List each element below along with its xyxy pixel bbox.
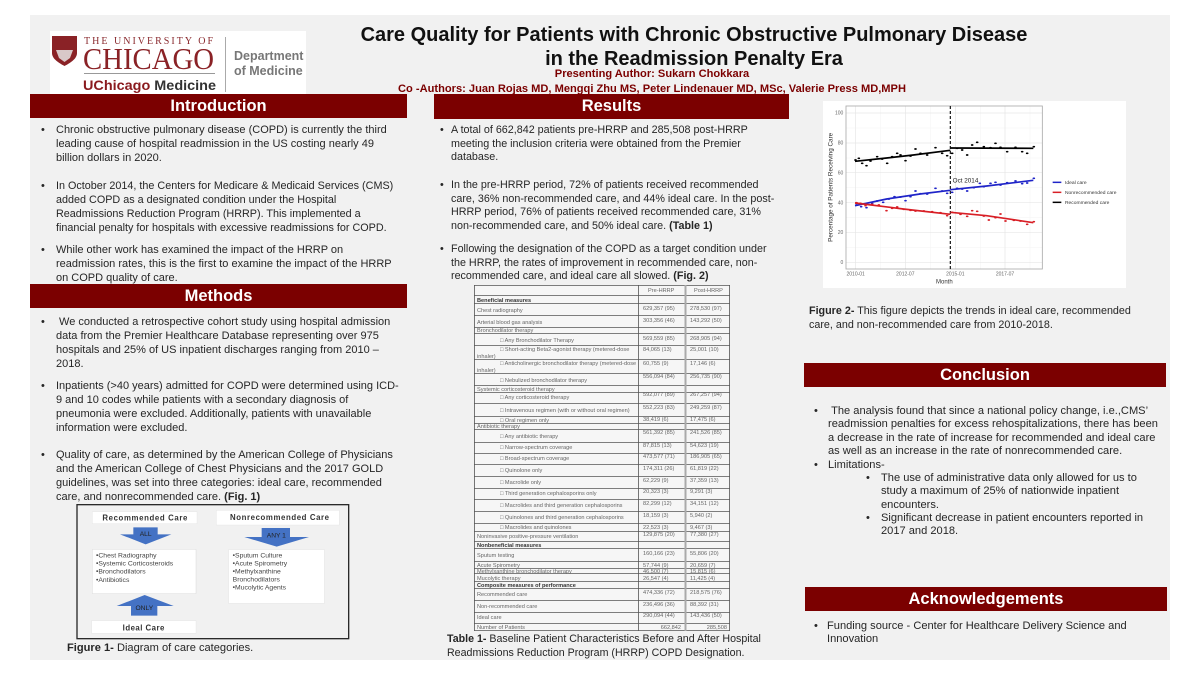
table 1: patient characteristics before and after HRRP: □ Oral regimen only bbox=[500, 418, 549, 424]
text block: conclusion bullets: • bbox=[814, 405, 818, 417]
text block: methods bullets: • bbox=[41, 449, 45, 461]
text block: introduction bullets: billion dollars in 2020. bbox=[56, 152, 162, 164]
heading: Results: Results bbox=[582, 97, 641, 115]
table 1: patient characteristics before and after HRRP: Antibiotic therapy bbox=[477, 424, 520, 430]
table 1: patient characteristics before and after HRRP: 268,905 (94) bbox=[690, 336, 722, 342]
legend: Nonrecommended care bbox=[1065, 190, 1117, 196]
text block: introduction bullets: added COPD as a designated condition under the Hospital bbox=[56, 194, 336, 206]
table 1: patient characteristics before and after HRRP: 267,257 (94) bbox=[690, 392, 722, 398]
series: recommended care bbox=[855, 142, 1034, 166]
heading: Methods: Methods bbox=[185, 287, 252, 305]
text block: conclusion bullets: • bbox=[814, 459, 818, 471]
heading: Acknowledgements bbox=[805, 587, 1167, 611]
presenting author and co-authors bbox=[398, 68, 906, 94]
table 1: patient characteristics before and after HRRP: 9,467 (3) bbox=[690, 525, 713, 531]
text block: results bullets: database. bbox=[451, 151, 498, 163]
presenting author and co-authors: Co -Authors: Juan Rojas MD, Mengqi Zhu MS, Peter Lindenauer MD, MSc, Valerie Press MD,MPH bbox=[398, 82, 906, 94]
table 1: patient characteristics before and after HRRP: □ Macrolides and third generation cephalosporins bbox=[500, 503, 623, 509]
table 1: patient characteristics before and after HRRP: 278,530 (97) bbox=[690, 306, 722, 312]
table 1: patient characteristics before and after HRRP: 160,166 (23) bbox=[643, 551, 675, 557]
box: ideal care: Ideal Care bbox=[123, 623, 165, 632]
text block: results bullets: A total of 662,842 patients pre-HRRP and 285,508 post-HRRP bbox=[451, 124, 748, 136]
table 1: patient characteristics before and after HRRP: 84,065 (13) bbox=[643, 347, 672, 353]
logo: University of Chicago, Department of Medicine: UChicago Medicine bbox=[83, 77, 216, 93]
text block: results bullets: • bbox=[440, 243, 444, 255]
table 1: patient characteristics before and after HRRP: 11,425 (4) bbox=[690, 576, 715, 582]
text block: results bullets: non-recommended care, and 50% ideal care. (Table 1) bbox=[451, 220, 713, 232]
text block: introduction bullets: • bbox=[41, 244, 45, 256]
title: Care Quality for Patients with Chronic Obstructive Pulmonary Disease bbox=[361, 24, 1027, 46]
table 1: patient characteristics before and after HRRP: 129,875 (20) bbox=[643, 532, 675, 538]
table 1: patient characteristics before and after HRRP: Sputum testing bbox=[477, 553, 514, 559]
table 1: patient characteristics before and after HRRP: 15,815 (6) bbox=[690, 569, 716, 575]
text block: conclusion bullets: • bbox=[866, 512, 870, 524]
legend: Recommended care bbox=[1065, 200, 1110, 206]
y axis labels bbox=[835, 111, 844, 266]
table 1: patient characteristics before and after HRRP: 20,659 (7) bbox=[690, 563, 716, 569]
table 1: patient characteristics before and after HRRP: Bronchodilator therapy bbox=[477, 328, 533, 334]
table 1: patient characteristics before and after HRRP: 87,815 (13) bbox=[643, 443, 672, 449]
y axis labels: 0 bbox=[841, 260, 844, 266]
text block: introduction bullets: While other work has examined the impact of the HRRP on bbox=[56, 244, 343, 256]
arrow: ALL bbox=[120, 527, 171, 544]
table 1: patient characteristics before and after HRRP: □ Quinolones and third generation cephalosporins bbox=[500, 515, 624, 521]
table 1: patient characteristics before and after HRRP: Ideal care bbox=[477, 615, 502, 621]
text block: introduction bullets: on COPD quality of care. bbox=[56, 272, 178, 284]
table 1: patient characteristics before and after HRRP: 22,523 (3) bbox=[643, 525, 669, 531]
table 1: patient characteristics before and after HRRP: 88,392 (31) bbox=[690, 602, 719, 608]
heading: Conclusion bbox=[804, 363, 1166, 387]
text block: methods bullets: information were excluded. bbox=[56, 422, 187, 434]
table 1: patient characteristics before and after HRRP: □ Macrolide only bbox=[500, 480, 541, 486]
table 1: patient characteristics before and after HRRP: 249,259 (87) bbox=[690, 405, 722, 411]
table 1: patient characteristics before and after HRRP: Noninvasive positive-pressure ventilation bbox=[477, 534, 578, 540]
caption: figure 1: Figure 1- Diagram of care categories. bbox=[67, 642, 253, 654]
table 1: patient characteristics before and after HRRP: 46,500 (7) bbox=[643, 569, 669, 575]
table 1: patient characteristics before and after HRRP: □ Short-acting Beta2-agonist therapy (metered-dose bbox=[500, 347, 629, 353]
heading: Methods bbox=[30, 284, 407, 308]
text block: methods bullets: hospitals and 25% of US inpatient discharges ranging from 2010 – bbox=[56, 344, 379, 356]
table 1: patient characteristics before and after HRRP: Methylxanthine bronchodilator therapy bbox=[477, 569, 572, 575]
list: recommended measures bbox=[92, 549, 196, 594]
text block: introduction bullets: In October 2014, the Centers for Medicare & Medicaid Services (CMS) bbox=[56, 180, 393, 192]
text block: results bullets bbox=[440, 124, 774, 282]
table 1: patient characteristics before and after HRRP: □ Nebulized bronchodilator therapy bbox=[500, 378, 587, 384]
text block: conclusion bullets: encounters. bbox=[881, 499, 939, 511]
y axis labels: 100 bbox=[835, 111, 844, 117]
text block: conclusion bullets: a decrease in the rate of increase for recommended and ideal care bbox=[828, 432, 1155, 444]
table 1: patient characteristics before and after HRRP: 20,323 (3) bbox=[643, 489, 669, 495]
caption: table 1: Table 1- Baseline Patient Characteristics Before and After Hospital bbox=[447, 633, 761, 645]
table 1: patient characteristics before and after HRRP bbox=[474, 285, 730, 631]
table 1: patient characteristics before and after HRRP: 256,735 (90) bbox=[690, 374, 722, 380]
y axis labels: 20 bbox=[838, 230, 844, 236]
table 1: patient characteristics before and after HRRP: □ Any antibiotic therapy bbox=[500, 434, 558, 440]
table 1: patient characteristics before and after HRRP: 82,299 (12) bbox=[643, 501, 672, 507]
table 1: patient characteristics before and after HRRP: □ Macrolides and quinolones bbox=[500, 525, 572, 531]
text block: methods bullets bbox=[41, 316, 399, 503]
x axis labels: 2017-07 bbox=[996, 271, 1014, 277]
table 1: patient characteristics before and after HRRP: □ Narrow-spectrum coverage bbox=[500, 445, 572, 451]
table 1: patient characteristics before and after HRRP: Pre-HRRP bbox=[648, 288, 675, 294]
table 1: patient characteristics before and after HRRP: Nonbeneficial measures bbox=[477, 543, 541, 549]
text block: results bullets: the HRRP, the rates of improvement in recommended care, non- bbox=[451, 257, 757, 269]
x axis labels bbox=[846, 271, 1014, 277]
x axis labels: 2012-07 bbox=[896, 271, 915, 277]
table 1: patient characteristics before and after HRRP: □ Any corticosteroid therapy bbox=[500, 395, 569, 401]
table 1: patient characteristics before and after HRRP: 290,094 (44) bbox=[643, 613, 675, 619]
caption: table 1 bbox=[447, 633, 761, 659]
y axis labels: 60 bbox=[838, 170, 844, 176]
text block: results bullets: care, 36% non-recommended care, and 44% ideal care. In the post- bbox=[451, 193, 774, 205]
table 1: patient characteristics before and after HRRP: 17,475 (6) bbox=[690, 417, 716, 423]
text block: methods bullets: care, and nonrecommended care. (Fig. 1) bbox=[56, 491, 260, 503]
table 1: patient characteristics before and after HRRP: 5,940 (2) bbox=[690, 513, 713, 519]
text block: methods bullets: 2018. bbox=[56, 358, 84, 370]
arrow: ONLY bbox=[117, 595, 174, 616]
table 1: patient characteristics before and after HRRP: 34,151 (12) bbox=[690, 501, 719, 507]
table 1: patient characteristics before and after HRRP: 218,575 (76) bbox=[690, 590, 722, 596]
table 1: patient characteristics before and after HRRP: Systemic corticosteroid therapy bbox=[477, 387, 555, 393]
title: in the Readmission Penalty Era bbox=[545, 48, 843, 70]
caption: figure 2 bbox=[809, 305, 1131, 331]
text block: methods bullets: We conducted a retrospective cohort study using hospital admission bbox=[59, 316, 390, 328]
arrow: ANY 1: ANY 1 bbox=[267, 533, 286, 540]
text block: conclusion bullets: 2017 and 2018. bbox=[881, 525, 958, 537]
series: ideal care bbox=[855, 178, 1034, 208]
table 1: patient characteristics before and after HRRP: 17,146 (6) bbox=[690, 361, 716, 367]
table 1: patient characteristics before and after HRRP: 569,559 (85) bbox=[643, 336, 675, 342]
logo: University of Chicago, Department of Medicine: CHICAGO bbox=[83, 41, 214, 76]
series: nonrecommended care bbox=[855, 203, 1034, 224]
text block: methods bullets: data from the Premier Healthcare Database representing over 975 bbox=[56, 330, 379, 342]
figure 1: diagram of care categories bbox=[76, 504, 350, 640]
table 1: patient characteristics before and after HRRP: 552,223 (83) bbox=[643, 405, 675, 411]
list: recommended measures: •Chest Radiography bbox=[96, 553, 157, 560]
list: nonrecommended measures: •Mucolytic Agents bbox=[233, 585, 287, 592]
text block: funding source: Funding source - Center for Healthcare Delivery Science and bbox=[827, 620, 1127, 632]
legend bbox=[1053, 180, 1117, 206]
logo: University of Chicago, Department of Medicine bbox=[50, 31, 306, 94]
table 1: patient characteristics before and after HRRP: 37,359 (13) bbox=[690, 478, 719, 484]
logo: University of Chicago, Department of Medicine: THE UNIVERSITY OF bbox=[84, 36, 213, 47]
table 1: patient characteristics before and after HRRP: 38,419 (6) bbox=[643, 417, 669, 423]
text block: conclusion bullets: study a maximum of 25% of nationwide inpatient bbox=[881, 485, 1119, 497]
axis title: Percentage of Patients Receiving Care: Percentage of Patients Receiving Care bbox=[827, 132, 834, 242]
text block: conclusion bullets: The analysis found that since a national policy change, i.e.,CMS’ bbox=[831, 405, 1148, 417]
table 1: patient characteristics before and after HRRP: inhaler) bbox=[477, 354, 496, 360]
text block: conclusion bullets: • bbox=[866, 472, 870, 484]
box: recommended care: Recommended Care bbox=[102, 513, 188, 522]
table 1: patient characteristics before and after HRRP: 26,547 (4) bbox=[643, 576, 669, 582]
text block: conclusion bullets: The use of administrative data only allowed for us to bbox=[881, 472, 1137, 484]
text block: results bullets: • bbox=[440, 124, 444, 136]
list: nonrecommended measures: •Acute Spirometry bbox=[233, 560, 288, 567]
text block: results bullets: In the pre-HRRP period, 72% of patients received recommended bbox=[451, 179, 759, 191]
table 1: patient characteristics before and after HRRP: 61,819 (22) bbox=[690, 466, 719, 472]
text block: methods bullets: Inpatients (>40 years) admitted for COPD were determined using ICD- bbox=[56, 380, 399, 392]
table 1: patient characteristics before and after HRRP: □ Quinolone only bbox=[500, 468, 542, 474]
text block: results bullets: HRRP period, 76% of patients received recommended care, 31% bbox=[451, 206, 761, 218]
vertical marker: Oct 2014: Oct 2014 bbox=[953, 177, 979, 184]
table 1: patient characteristics before and after HRRP: 285,508 bbox=[707, 625, 727, 631]
text block: results bullets: meeting the inclusion criteria were obtained from the Premier bbox=[451, 138, 741, 150]
text block: introduction bullets: leading cause of hospital readmission in the US costing nearly 49 bbox=[56, 138, 374, 150]
caption: figure 2: care, and non-recommended care from 2010-2018. bbox=[809, 319, 1053, 331]
box: ideal care bbox=[92, 621, 196, 633]
title bbox=[361, 24, 1027, 70]
text block: methods bullets: • bbox=[41, 380, 45, 392]
table 1: patient characteristics before and after HRRP: 25,001 (10) bbox=[690, 347, 719, 353]
logo: University of Chicago, Department of Medicine: of Medicine bbox=[234, 64, 303, 78]
table 1: patient characteristics before and after HRRP: 143,292 (50) bbox=[690, 318, 722, 324]
table 1: patient characteristics before and after HRRP: 143,436 (50) bbox=[690, 613, 722, 619]
text block: introduction bullets: financial penalty for hospitals with excessive readmissions for COPD. bbox=[56, 222, 387, 234]
table 1: patient characteristics before and after HRRP: inhaler) bbox=[477, 368, 496, 374]
table 1: patient characteristics before and after HRRP: □ Any Bronchodilator Therapy bbox=[500, 338, 574, 344]
table 1: patient characteristics before and after HRRP: 62,229 (9) bbox=[643, 478, 669, 484]
table 1: patient characteristics before and after HRRP: 9,291 (3) bbox=[690, 489, 713, 495]
figure 2: trend line chart bbox=[823, 101, 1126, 288]
text block: introduction bullets: • bbox=[41, 124, 45, 136]
table 1: patient characteristics before and after HRRP: Composite measures of performance bbox=[477, 583, 576, 589]
text block: introduction bullets: readmission rates, this is the first to examine the impact of the HRRP bbox=[56, 258, 392, 270]
heading: Introduction bbox=[30, 94, 407, 118]
text block: introduction bullets: Readmissions Reduction Program (HRRP). This implemented a bbox=[56, 208, 361, 220]
table 1: patient characteristics before and after HRRP: Post-HRRP bbox=[694, 288, 723, 294]
list: recommended measures: •Systemic Corticosteroids bbox=[96, 561, 174, 568]
table 1: patient characteristics before and after HRRP: 474,336 (72) bbox=[643, 590, 675, 596]
table 1: patient characteristics before and after HRRP: 561,392 (85) bbox=[643, 430, 675, 436]
table 1: patient characteristics before and after HRRP: 556,094 (84) bbox=[643, 374, 675, 380]
list: recommended measures: •Bronchodilators bbox=[96, 569, 146, 576]
heading: Acknowledgements: Acknowledgements bbox=[909, 590, 1063, 608]
text block: results bullets: Following the designation of the COPD as a target condition under bbox=[451, 243, 767, 255]
text block: methods bullets: Quality of care, as determined by the American College of Physicians bbox=[56, 449, 393, 461]
list: nonrecommended measures: •Sputum Culture bbox=[233, 552, 282, 559]
table 1: patient characteristics before and after HRRP: □ Third generation cephalosporins only bbox=[500, 491, 597, 497]
heading: Results bbox=[434, 94, 789, 119]
text block: funding source bbox=[814, 620, 1127, 645]
text block: conclusion bullets: as well as an increase in the rate of nonrecommended care. bbox=[828, 445, 1122, 457]
table 1: patient characteristics before and after HRRP: 18,159 (3) bbox=[643, 513, 669, 519]
table 1: patient characteristics before and after HRRP: Acute Spirometry bbox=[477, 563, 520, 569]
table 1: patient characteristics before and after HRRP: 236,496 (36) bbox=[643, 602, 675, 608]
box: nonrecommended care bbox=[216, 510, 339, 525]
text block: introduction bullets bbox=[41, 124, 393, 284]
logo: University of Chicago, Department of Medicine: Department bbox=[234, 49, 304, 63]
box: recommended care bbox=[92, 512, 197, 524]
y axis labels: 40 bbox=[838, 200, 844, 206]
arrow: ANY 1 bbox=[244, 528, 309, 547]
table 1: patient characteristics before and after HRRP: 186,905 (65) bbox=[690, 454, 722, 460]
table 1: patient characteristics before and after HRRP: 662,842 bbox=[661, 625, 681, 631]
table 1: patient characteristics before and after HRRP: 592,077 (89) bbox=[643, 392, 675, 398]
table 1: patient characteristics before and after HRRP: □ Broad-spectrum coverage bbox=[500, 456, 569, 462]
table 1: patient characteristics before and after HRRP: Chest radiography bbox=[477, 308, 523, 314]
legend: Ideal care bbox=[1065, 180, 1087, 186]
table 1: patient characteristics before and after HRRP: □ Anticholinergic bronchodilator therapy (metered-dose bbox=[500, 361, 636, 367]
table 1: patient characteristics before and after HRRP: 473,577 (71) bbox=[643, 454, 675, 460]
arrow: ONLY: ONLY bbox=[136, 605, 154, 612]
table 1: patient characteristics before and after HRRP: 77,380 (27) bbox=[690, 532, 719, 538]
text block: results bullets: • bbox=[440, 179, 444, 191]
table 1: patient characteristics before and after HRRP: 629,357 (95) bbox=[643, 306, 675, 312]
table 1: patient characteristics before and after HRRP: Beneficial measures bbox=[477, 298, 531, 304]
x axis labels: 2010-01 bbox=[846, 271, 865, 277]
list: nonrecommended measures bbox=[229, 550, 324, 603]
text block: conclusion bullets: Limitations- bbox=[828, 459, 885, 471]
list: nonrecommended measures: •Methylxanthine bbox=[233, 568, 281, 575]
table 1: patient characteristics before and after HRRP: Non-recommended care bbox=[477, 604, 537, 610]
box: nonrecommended care: Nonrecommended Care bbox=[230, 513, 330, 522]
table 1: patient characteristics before and after HRRP: 174,311 (26) bbox=[643, 466, 674, 472]
table 1: patient characteristics before and after HRRP: 55,806 (20) bbox=[690, 551, 719, 557]
text block: methods bullets: pneumonia were excluded. Additionally, patients with unavailable bbox=[56, 408, 371, 420]
text block: methods bullets: • bbox=[41, 316, 45, 328]
list: recommended measures: •Antibiotics bbox=[96, 577, 130, 584]
table 1: patient characteristics before and after HRRP: Mucolytic therapy bbox=[477, 576, 521, 582]
arrow: ALL: ALL bbox=[140, 531, 152, 538]
y axis labels: 80 bbox=[838, 141, 844, 147]
table 1: patient characteristics before and after HRRP: 241,526 (85) bbox=[690, 430, 722, 436]
table 1: patient characteristics before and after HRRP: 57,744 (9) bbox=[643, 563, 669, 569]
axis title: Month: Month bbox=[936, 280, 953, 286]
text block: conclusion bullets bbox=[814, 405, 1158, 537]
table 1: patient characteristics before and after HRRP: 303,356 (46) bbox=[643, 318, 675, 324]
table 1: patient characteristics before and after HRRP: Arterial blood gas analysis bbox=[477, 320, 542, 326]
text block: conclusion bullets: readmission penalties for excess rehospitalizations, there has been bbox=[828, 418, 1158, 430]
text block: methods bullets: 9 and 10 codes while patients with a secondary diagnosis of bbox=[56, 394, 348, 406]
text block: conclusion bullets: Significant decrease in patient encounters reported in bbox=[881, 512, 1143, 524]
caption: table 1: Readmissions Reduction Program (HRRP) COPD Designation. bbox=[447, 647, 744, 659]
table 1: patient characteristics before and after HRRP: 60,755 (9) bbox=[643, 361, 669, 367]
text block: methods bullets: guidelines, was set into three categories: ideal care, recommended bbox=[56, 477, 382, 489]
text block: introduction bullets: Chronic obstructive pulmonary disease (COPD) is currently the third bbox=[56, 124, 387, 136]
table 1: patient characteristics before and after HRRP: 54,623 (19) bbox=[690, 443, 719, 449]
text block: introduction bullets: • bbox=[41, 180, 45, 192]
presenting author and co-authors: Presenting Author: Sukarn Chokkara bbox=[555, 68, 749, 80]
text block: funding source: • bbox=[814, 620, 818, 632]
list: nonrecommended measures: Bronchodilators bbox=[233, 576, 280, 583]
table 1: patient characteristics before and after HRRP: Recommended care bbox=[477, 592, 527, 598]
caption: figure 2: Figure 2- This figure depicts the trends in ideal care, recommended bbox=[809, 305, 1131, 317]
heading: Conclusion: Conclusion bbox=[940, 366, 1030, 384]
table 1: patient characteristics before and after HRRP: □ Intravenous regimen (with or without oral regimen) bbox=[500, 408, 630, 414]
text block: methods bullets: and the American College of Chest Physicians and the 2017 GOLD bbox=[56, 463, 383, 475]
x axis labels: 2015-01 bbox=[946, 271, 965, 277]
heading: Introduction: Introduction bbox=[170, 97, 267, 115]
text block: funding source: Innovation bbox=[827, 633, 878, 645]
table 1: patient characteristics before and after HRRP: Number of Patients bbox=[477, 625, 525, 631]
text block: results bullets: recommended care, and ideal care all slowed. (Fig. 2) bbox=[451, 270, 709, 282]
